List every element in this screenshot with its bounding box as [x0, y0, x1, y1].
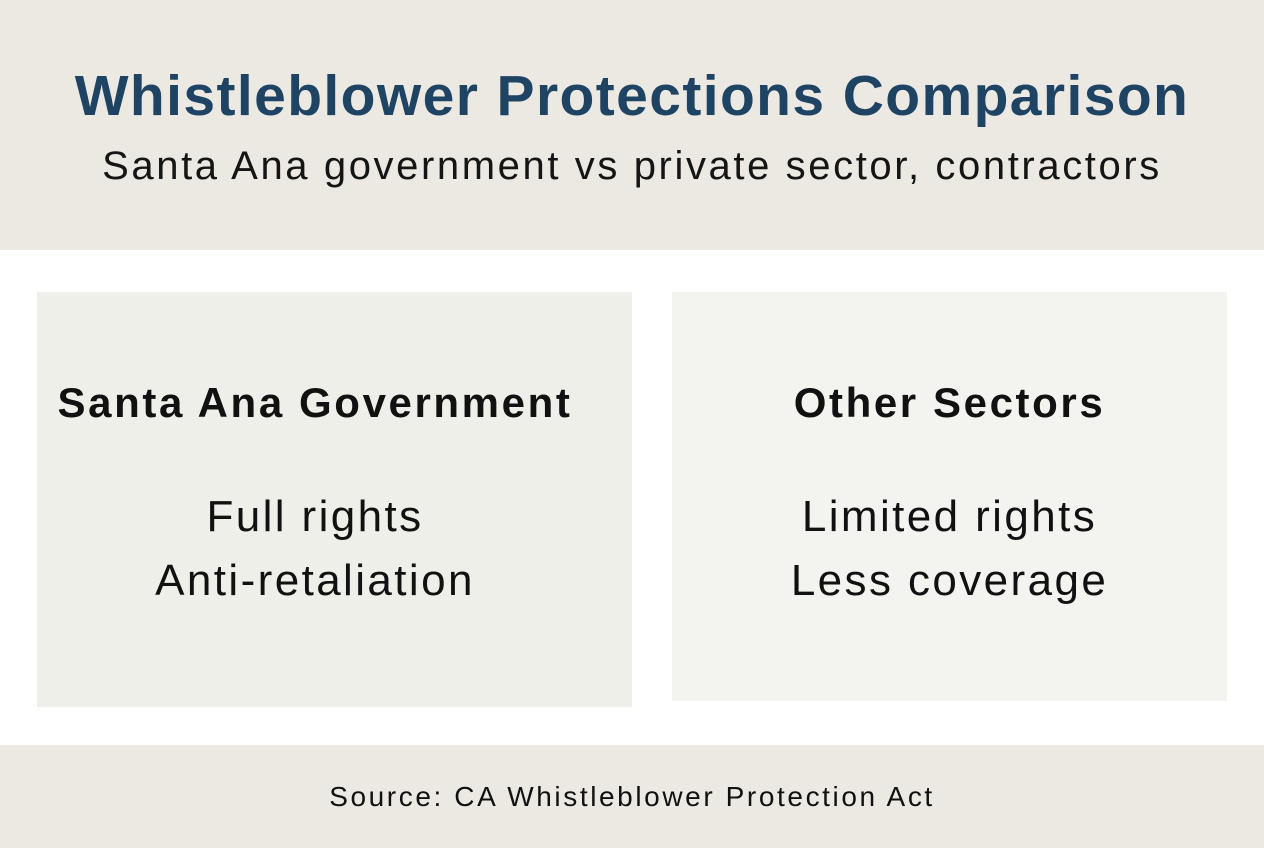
footer band	[0, 745, 1264, 848]
panel heading: Santa Ana Government	[58, 379, 572, 426]
panel text: Anti-retaliation	[155, 556, 475, 605]
source text: Source: CA Whistleblower Protection Act	[329, 781, 935, 812]
subtitle: Santa Ana government vs private sector, contractors	[102, 144, 1162, 188]
panel text	[155, 492, 475, 605]
panel text: Full rights	[206, 492, 424, 541]
panel text	[791, 492, 1108, 605]
header band	[0, 0, 1264, 250]
panel text: Less coverage	[791, 556, 1108, 605]
panel text: Limited rights	[802, 492, 1097, 541]
panel: Other Sectors	[672, 292, 1227, 701]
panel heading: Other Sectors	[794, 379, 1105, 426]
panel: Santa Ana Government	[37, 292, 632, 707]
title: Whistleblower Protections Comparison	[75, 64, 1189, 128]
